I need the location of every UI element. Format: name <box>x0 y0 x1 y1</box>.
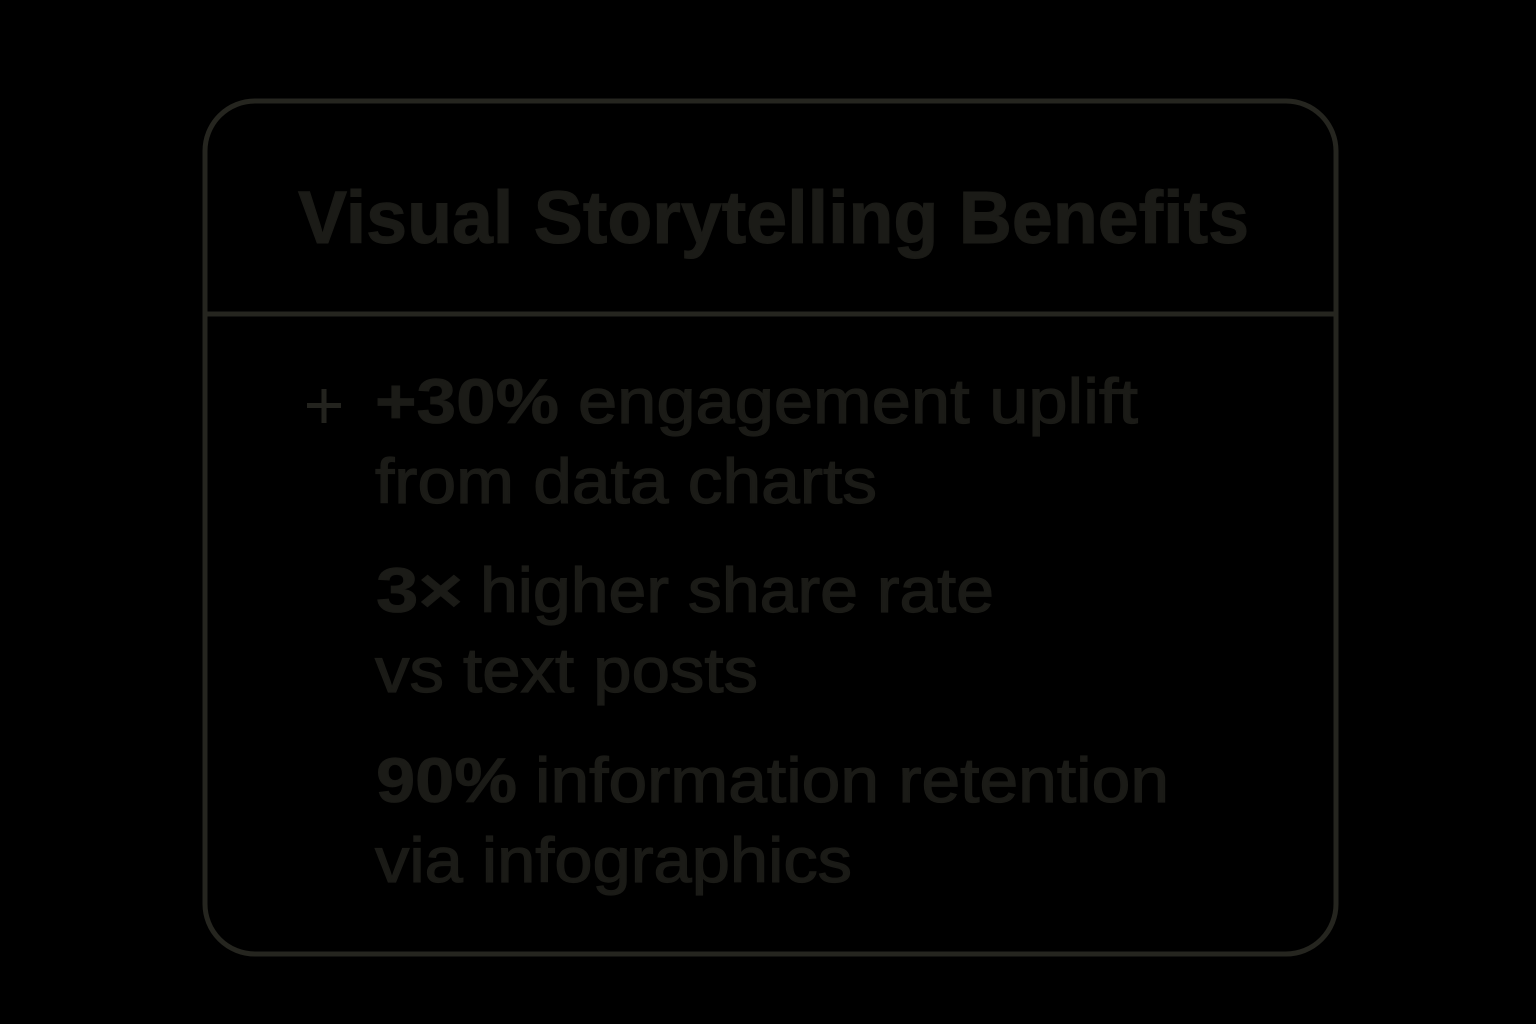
benefit: engagement uplift, second line: from data charts <box>375 447 877 517</box>
title: Visual Storytelling Benefits <box>298 176 1249 259</box>
benefit: share rate: 3× <box>376 556 463 626</box>
benefit: share rate: higher share rate <box>480 556 994 626</box>
benefit: information retention: 90% <box>376 746 517 816</box>
benefit: information retention: information retention <box>535 746 1169 816</box>
benefit: information retention, second line: via infographics <box>375 826 852 896</box>
benefit: share rate, second line: vs text posts <box>375 636 758 706</box>
panel: benefits card <box>205 101 1336 954</box>
benefit: engagement uplift: +30% <box>375 367 559 437</box>
icon: plus bullet <box>307 389 341 423</box>
benefit: engagement uplift <box>375 367 1139 437</box>
benefit: engagement uplift: engagement uplift <box>578 367 1139 437</box>
